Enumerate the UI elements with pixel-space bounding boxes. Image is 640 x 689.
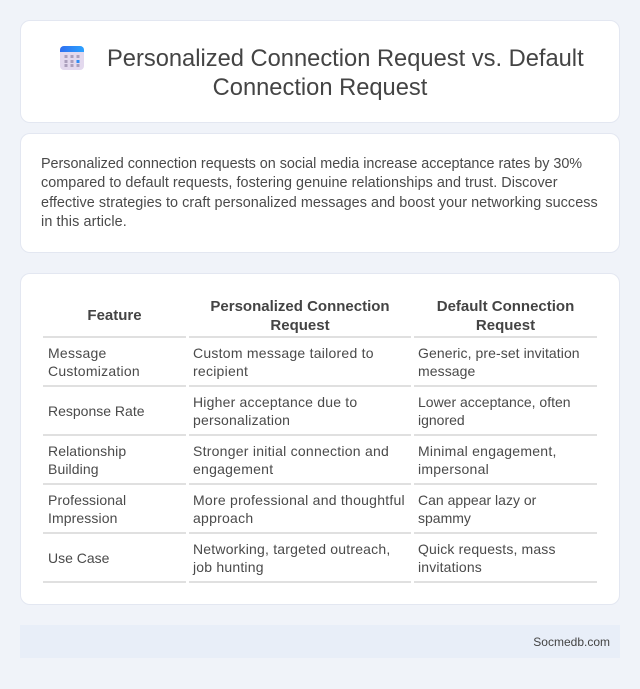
- intro text: compared to default requests, fostering genuine relationships and trust. Discover: [41, 175, 558, 191]
- row: Message Customization: Customization: [48, 363, 140, 379]
- row: Use Case: Use Case: [48, 550, 109, 566]
- header: Feature: Feature: [87, 307, 142, 324]
- row: Relationship Building: Relationship: [48, 443, 126, 459]
- title second line: Connection Request: [213, 75, 427, 101]
- intro text: Personalized connection requests on social media increase acceptance rates by 30%: [41, 156, 582, 172]
- cell: lazy or spammy: Can appear lazy or: [418, 492, 536, 508]
- cell: quick requests: Quick requests, mass: [418, 541, 556, 557]
- cell: higher acceptance: personalization: [193, 412, 290, 428]
- cell: more professional: approach: [193, 510, 253, 526]
- cell: lazy or spammy: [418, 492, 536, 526]
- header: Default Connection Request: Default Connection: [437, 298, 574, 315]
- footer credit: Socmedb.com: [533, 635, 610, 649]
- footer bar: [20, 625, 620, 658]
- icon: calendar: [60, 46, 84, 70]
- cell: lower acceptance: ignored: [418, 412, 465, 428]
- cell: lower acceptance: Lower acceptance, often: [418, 394, 571, 410]
- title: Personalized Connection Request vs. Default: [107, 46, 584, 72]
- panel: title card: [20, 20, 620, 123]
- cell: minimal engagement: [418, 443, 557, 477]
- panel: comparison table card: [20, 273, 620, 605]
- cell: stronger connection: Stronger initial connection and: [193, 443, 389, 459]
- cell: minimal engagement: Minimal engagement,: [418, 443, 557, 459]
- cell: networking: [192, 541, 390, 575]
- cell: custom message: recipient: [193, 363, 248, 379]
- cell: minimal engagement: impersonal: [418, 461, 489, 477]
- cell: more professional: [193, 492, 405, 526]
- comparison table: [43, 298, 597, 583]
- cell: quick requests: [418, 541, 556, 575]
- intro text: effective strategies to craft personalized messages and boost your networking success: [41, 195, 598, 211]
- row: Response Rate: Response Rate: [48, 403, 145, 419]
- intro text: [41, 156, 598, 230]
- cell: generic message: [418, 345, 580, 379]
- header: Personalized Connection Request: Request: [270, 317, 330, 334]
- cell: generic message: Generic, pre-set invitation: [418, 345, 580, 361]
- cell: more professional: More professional and thoughtful: [193, 492, 405, 508]
- cell: networking: job hunting: [193, 559, 264, 575]
- row: Relationship Building: [48, 443, 126, 477]
- cell: lower acceptance: [418, 394, 571, 428]
- cell: stronger connection: engagement: [193, 461, 273, 477]
- row: Professional Impression: [48, 492, 126, 526]
- cell: lazy or spammy: spammy: [418, 510, 471, 526]
- header: Default Connection Request: [437, 298, 574, 334]
- cell: generic message: message: [418, 363, 475, 379]
- cell: custom message: [193, 345, 374, 379]
- header: Default Connection Request: Request: [476, 317, 535, 334]
- cell: quick requests: invitations: [418, 559, 482, 575]
- row: Professional Impression: Professional: [48, 492, 126, 508]
- row: Message Customization: [48, 345, 140, 379]
- panel: introduction card: [20, 133, 620, 253]
- cell: custom message: Custom message tailored to: [193, 345, 374, 361]
- cell: higher acceptance: Higher acceptance due to: [193, 394, 357, 410]
- row: Professional Impression: Impression: [48, 510, 117, 526]
- cell: networking: Networking, targeted outreach,: [193, 541, 390, 557]
- row: Relationship Building: Building: [48, 461, 99, 477]
- header: Personalized Connection Request: [210, 298, 390, 334]
- intro text: in this article.: [41, 214, 127, 230]
- row: Message Customization: Message: [48, 345, 107, 361]
- cell: stronger connection: [193, 443, 389, 477]
- cell: higher acceptance: [193, 394, 357, 428]
- header: Personalized Connection Request: Personalized Connection: [210, 298, 390, 315]
